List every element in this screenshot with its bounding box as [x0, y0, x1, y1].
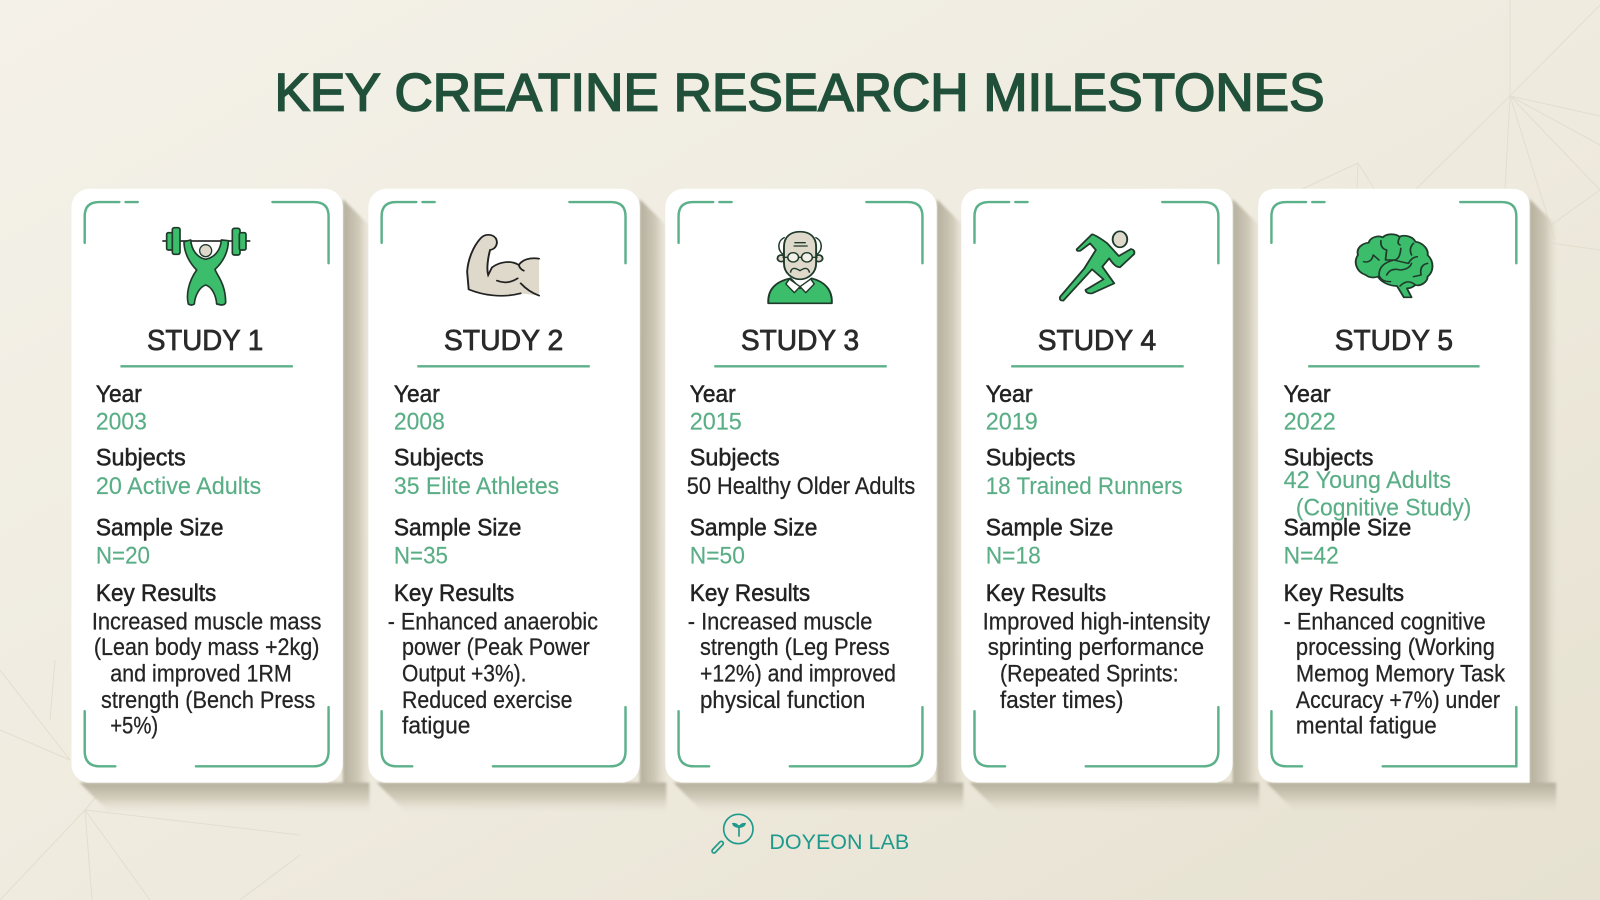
- study 1 details: N=20: [96, 542, 150, 569]
- study 2 details: [388, 381, 598, 740]
- study 2 details: Reduced exercise: [402, 687, 572, 714]
- study 1 details: strength (Bench Press: [101, 687, 315, 714]
- study 4 details: Key Results: [986, 580, 1106, 607]
- study 4 details: 18 Trained Runners: [986, 473, 1183, 500]
- panel: study 5: [1258, 189, 1556, 813]
- study 3 details: N=50: [690, 542, 745, 569]
- study 2 details: power (Peak Power: [402, 634, 590, 661]
- study 3 details: 50 Healthy Older Adults: [687, 473, 915, 500]
- panel: study 2: [368, 189, 666, 813]
- icon: runner: [1060, 231, 1134, 301]
- study 2 details: Year: [394, 381, 440, 408]
- study 5 heading: STUDY 5: [1335, 325, 1453, 357]
- study 1 details: +5%): [110, 713, 158, 740]
- icon: older man: [768, 232, 832, 303]
- study 1 details: [92, 381, 321, 740]
- study 1 details: Year: [96, 381, 142, 408]
- study 4 details: faster times): [1000, 687, 1123, 714]
- study 2 details: - Enhanced anaerobic: [388, 609, 598, 636]
- study 3 details: Year: [690, 381, 736, 408]
- study 1 details: Key Results: [96, 580, 216, 607]
- panel: study 3: [665, 189, 963, 813]
- study 1 details: and improved 1RM: [110, 661, 292, 688]
- panel: study 4: [961, 189, 1259, 813]
- study 1 details: (Lean body mass +2kg): [94, 634, 319, 661]
- icon: weightlifter: [162, 228, 250, 305]
- study 2 details: fatigue: [402, 713, 470, 740]
- study 4 details: Subjects: [986, 444, 1076, 471]
- study 2 details: Key Results: [394, 580, 514, 607]
- study 5 details: mental fatigue: [1296, 713, 1437, 740]
- study 1 details: 20 Active Adults: [96, 473, 261, 500]
- study 1 details: Increased muscle mass: [92, 609, 321, 636]
- study 1 details: Subjects: [96, 444, 186, 471]
- study 3 details: Subjects: [690, 444, 780, 471]
- study 3 details: - Increased muscle: [688, 609, 872, 636]
- study 5 details: - Enhanced cognitive: [1284, 609, 1486, 636]
- title: KEY CREATINE RESEARCH MILESTONES: [274, 64, 1324, 123]
- study 4 details: (Repeated Sprints:: [1000, 661, 1179, 688]
- study 1 details: Sample Size: [96, 515, 223, 542]
- study 5 details: [1284, 381, 1506, 740]
- study 4 details: sprinting performance: [988, 634, 1204, 661]
- study 5 details: Subjects: [1284, 444, 1373, 471]
- icon: logo magnifier sprout: [714, 814, 753, 851]
- study 2 details: 35 Elite Athletes: [394, 473, 559, 500]
- study 5 details: Year: [1284, 381, 1331, 408]
- study 5 details: Key Results: [1284, 580, 1404, 607]
- study 2 heading: STUDY 2: [444, 325, 563, 357]
- study 3 details: 2015: [690, 409, 742, 436]
- study 4 details: N=18: [986, 542, 1041, 569]
- footer brand name: DOYEON LAB: [769, 830, 909, 854]
- study 3 details: strength (Leg Press: [700, 634, 890, 661]
- study 4 details: Improved high-intensity: [983, 609, 1210, 636]
- study 5 details: Accuracy +7%) under: [1296, 687, 1500, 714]
- study 4 details: Year: [986, 381, 1033, 408]
- study 4 heading: STUDY 4: [1038, 325, 1156, 357]
- study 3 details: Key Results: [690, 580, 810, 607]
- study 4 details: [983, 381, 1210, 714]
- study 5 details: Memog Memory Task: [1296, 661, 1506, 688]
- study 5 details: Sample Size: [1284, 515, 1411, 542]
- study 2 details: 2008: [394, 409, 445, 436]
- study 5 details: N=42: [1284, 542, 1339, 569]
- study 3 details: [687, 381, 915, 714]
- study 5 details: processing (Working: [1296, 634, 1495, 661]
- icon: flexed arm: [467, 235, 539, 296]
- study 2 details: Sample Size: [394, 515, 521, 542]
- study 2 details: N=35: [394, 542, 448, 569]
- icon: brain: [1356, 234, 1432, 297]
- study 3 heading: STUDY 3: [741, 325, 859, 357]
- study 5 details: 2022: [1284, 409, 1336, 436]
- study 2 details: Output +3%).: [402, 661, 527, 688]
- study 4 details: Sample Size: [986, 515, 1113, 542]
- study 5 details: (Cognitive Study): [1296, 494, 1471, 521]
- study 5 details: 42 Young Adults: [1284, 467, 1451, 494]
- study 4 details: 2019: [986, 409, 1038, 436]
- study 3 details: physical function: [700, 687, 865, 714]
- study 1 details: 2003: [96, 409, 147, 436]
- study 3 details: +12%) and improved: [700, 661, 896, 688]
- study 1 heading: STUDY 1: [147, 325, 263, 357]
- study 3 details: Sample Size: [690, 515, 817, 542]
- panel: study 1: [71, 189, 369, 813]
- study 2 details: Subjects: [394, 444, 484, 471]
